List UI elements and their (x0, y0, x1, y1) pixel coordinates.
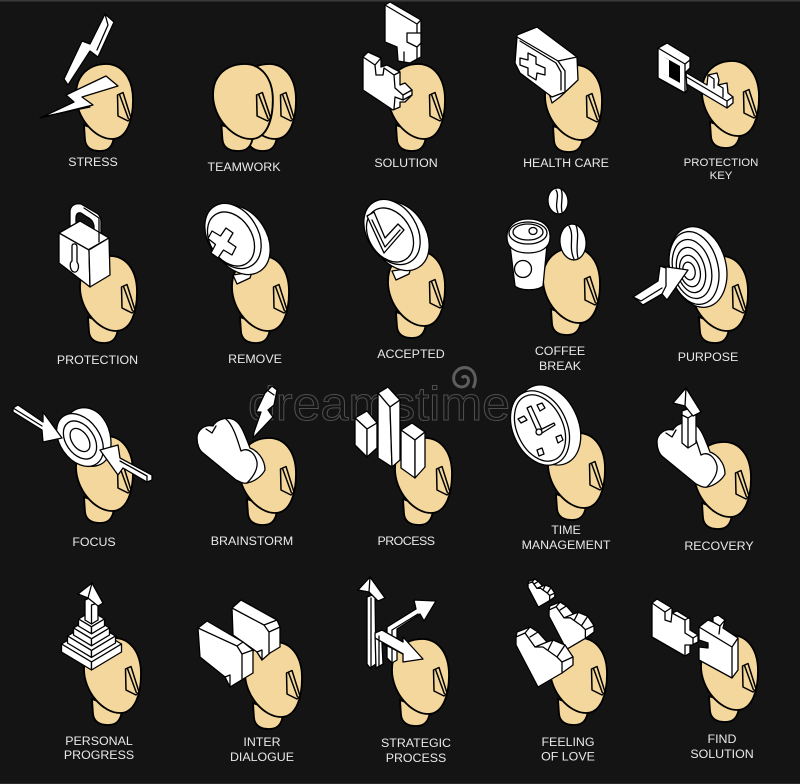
head (245, 642, 302, 729)
cell: recovery (657, 388, 754, 553)
cell: personal progress: PROGRESS (64, 748, 134, 762)
cell: inter dialogue: DIALOGUE (230, 750, 294, 764)
icon: clock (499, 375, 593, 475)
cell: time management: MANAGEMENT (522, 538, 611, 552)
cell: health care (515, 27, 609, 170)
icon: arrow right (100, 445, 152, 482)
icon: target (47, 405, 113, 475)
label: TEAMWORK (208, 160, 281, 174)
cell: coffee break (507, 187, 600, 373)
head (388, 251, 445, 338)
labels: PERSONAL (65, 734, 133, 748)
icon: arrow up (78, 583, 103, 624)
cell: solution (363, 2, 445, 170)
icon: bars (355, 387, 425, 478)
cell: purpose (633, 220, 748, 364)
labels: TIME (551, 523, 581, 537)
cell: process (355, 387, 452, 548)
head (76, 436, 133, 523)
cell: time management (499, 375, 611, 552)
cell: stress (40, 14, 133, 169)
label: SOLUTION (374, 156, 438, 170)
head (550, 638, 607, 725)
icon: pyramid (62, 611, 122, 670)
label: REMOVE (228, 352, 282, 366)
icon: small heart (528, 579, 555, 607)
icon: target (661, 220, 735, 314)
icon: arrow up (673, 388, 701, 448)
cell: coffee break: BREAK (539, 359, 582, 373)
head (694, 442, 751, 529)
cell: personal progress (62, 583, 141, 762)
watermark (248, 368, 510, 430)
icon: medium heart (549, 602, 594, 649)
icon: coffee beans (547, 187, 588, 261)
icon: key (658, 43, 733, 108)
label: STRESS (68, 155, 118, 169)
head (84, 638, 141, 725)
head (702, 61, 759, 148)
icon: large heart (516, 627, 573, 687)
icon: coffee cup (507, 219, 550, 290)
cell: remove (193, 193, 289, 366)
cell: strategic process: PROCESS (386, 751, 446, 765)
head (548, 433, 605, 520)
cell: accepted (352, 189, 445, 361)
icon: puzzle left (652, 599, 698, 656)
cell: teamwork (208, 64, 296, 174)
cell: feeling of love (516, 579, 607, 764)
icon: lightning (40, 14, 118, 118)
head (388, 64, 445, 151)
head (392, 639, 449, 726)
label: ACCEPTED (377, 347, 445, 361)
cell: feeling of love: OF LOVE (541, 750, 595, 764)
labels: FIND (708, 732, 736, 746)
labels: FEELING (541, 735, 595, 749)
head (80, 256, 137, 343)
icon: back speech bubble (232, 600, 280, 660)
icon: puzzle (363, 2, 421, 110)
icon: branching arrows (358, 577, 436, 668)
icon: arrow (633, 266, 688, 305)
icon: puzzle right (699, 615, 738, 678)
label: PURPOSE (678, 350, 738, 364)
watermark text: dreamstime (248, 377, 510, 430)
label: PROCESS (377, 534, 435, 548)
icon: medical bubble (515, 27, 578, 103)
icon: arrow left (13, 405, 62, 442)
head (232, 256, 289, 343)
icon: remove bubble (193, 193, 283, 286)
cell: focus (13, 405, 152, 549)
icon: accepted bubble (352, 189, 442, 282)
cell: find solution: SOLUTION (690, 747, 754, 761)
icon: cloud (197, 418, 265, 483)
label: HEALTH CARE (523, 156, 609, 170)
cell: strategic process (358, 577, 451, 765)
icon: lightning (253, 386, 277, 438)
head back (239, 64, 296, 151)
head (239, 438, 296, 525)
label: FOCUS (72, 535, 116, 549)
label: BRAINSTORM (211, 534, 293, 548)
icon: padlock (59, 204, 110, 287)
cell: protection key (658, 43, 759, 182)
head (545, 65, 602, 152)
head front (213, 64, 273, 151)
labels: INTER (243, 735, 281, 749)
cell: find solution (652, 599, 758, 761)
head (543, 248, 600, 335)
icon: cloud (657, 422, 725, 487)
labels: PROTECTION (684, 157, 758, 169)
cell: protection (57, 204, 138, 367)
watermark spiral (454, 368, 475, 388)
head (691, 256, 748, 343)
icon: front speech bubble (198, 621, 253, 687)
cell: brainstorm (197, 386, 296, 548)
label: RECOVERY (684, 539, 754, 553)
cell: inter dialogue (198, 600, 302, 764)
labels: COFFEE (535, 344, 585, 358)
cell: protection key: KEY (710, 170, 733, 182)
head (701, 635, 758, 722)
head (395, 438, 452, 525)
label: PROTECTION (57, 353, 138, 367)
labels: STRATEGIC (381, 736, 451, 750)
head (76, 64, 133, 151)
